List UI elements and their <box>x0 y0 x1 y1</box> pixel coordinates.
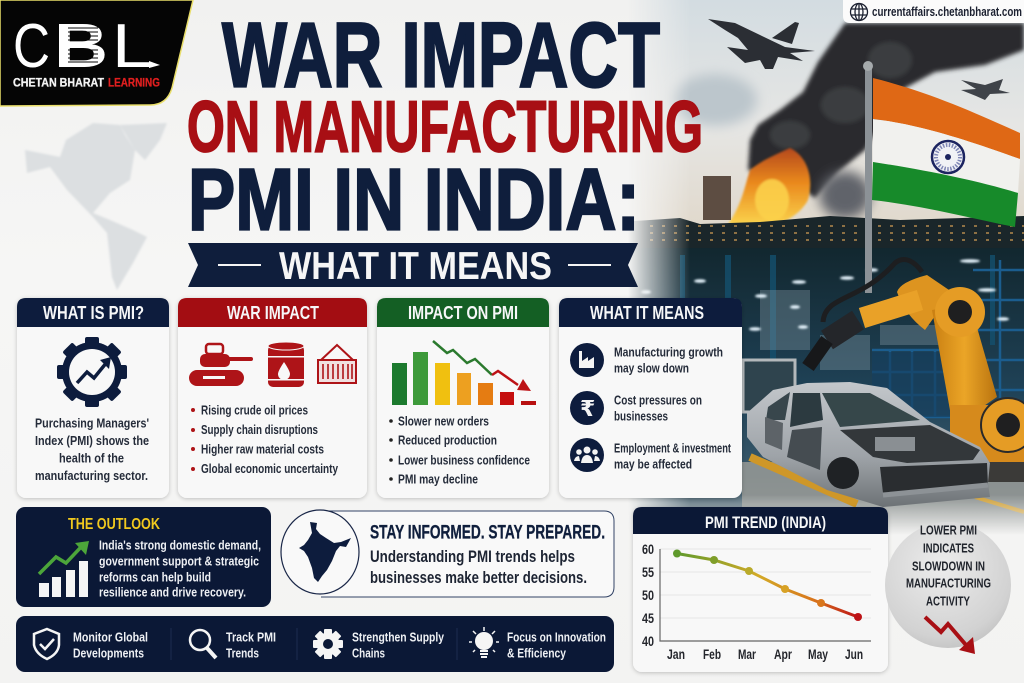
ceiling lights <box>641 259 1009 331</box>
description: government support & strategic <box>99 554 259 568</box>
label: monitor <box>73 630 148 660</box>
cloud <box>673 74 757 126</box>
panel: what is pmi <box>17 298 169 498</box>
bullet list: Supply chain disruptions <box>201 422 318 437</box>
forearm <box>862 300 920 318</box>
jet fighter small <box>961 79 1010 100</box>
title: ON MANUFACTURING <box>187 88 703 168</box>
panel: stay informed <box>281 510 614 597</box>
icon: oil barrel <box>268 342 304 387</box>
logo letters CBL: C <box>13 12 50 81</box>
subtitle banner <box>188 243 638 288</box>
item: growth <box>614 344 723 376</box>
logo caption: LEARNING <box>108 76 160 90</box>
robotic arm <box>808 260 1024 482</box>
logo caption: CHETAN BHARAT <box>13 76 105 90</box>
label: track: Trends <box>226 646 259 660</box>
factory columns <box>680 255 995 360</box>
arrow: downward <box>925 617 975 654</box>
ashoka chakra <box>932 141 964 173</box>
bar chart declining <box>392 341 536 405</box>
city skyline <box>630 216 1024 248</box>
door window <box>790 393 823 427</box>
panel: pmi trend chart <box>633 507 888 672</box>
text: businesses make better decisions. <box>370 568 587 587</box>
item: growth: may slow down <box>614 360 689 376</box>
factory windows <box>760 290 940 370</box>
logo letters CBL: B <box>54 12 108 81</box>
item: cost <box>614 392 702 424</box>
cable <box>823 260 922 322</box>
world map backdrop <box>25 123 167 290</box>
wrist <box>827 320 858 340</box>
callout: lower pmi: LOWER PMI <box>920 524 977 538</box>
item: cost: businesses <box>614 408 668 424</box>
base joint <box>950 398 1024 482</box>
wheel arch <box>827 457 859 489</box>
website badge <box>843 0 1024 23</box>
factory hall <box>620 248 1024 535</box>
y axis labels: 45 <box>642 610 654 626</box>
heading: THE OUTLOOK <box>68 516 160 533</box>
logo caption <box>13 76 160 90</box>
panel: what it means <box>559 298 742 498</box>
description: manufacturing sector. <box>35 468 148 483</box>
heading: WAR IMPACT <box>227 303 319 323</box>
engine block <box>875 437 915 451</box>
smoke plume <box>748 23 1024 198</box>
bullet list: Reduced production <box>398 432 497 448</box>
item: employment: Employment & investment <box>614 440 731 456</box>
x axis labels: Jan <box>667 646 685 662</box>
grid lines and axes <box>660 549 871 641</box>
callout: lower pmi: ACTIVITY <box>926 594 971 608</box>
y axis labels: 60 <box>642 541 654 557</box>
door opening <box>787 427 822 470</box>
callout: lower pmi <box>885 522 1011 654</box>
icon: gear <box>313 629 343 659</box>
icon: gear with chart <box>57 337 127 407</box>
description: Purchasing Managers' <box>35 416 149 430</box>
bullet list: Lower business confidence <box>398 452 530 468</box>
callout: lower pmi: INDICATES <box>923 542 974 556</box>
bullet list <box>191 402 339 476</box>
flagpole <box>863 61 873 293</box>
icon: shield <box>34 629 59 659</box>
distant smoke <box>819 171 871 219</box>
title <box>187 4 703 248</box>
subtitle banner: WHAT IT MEANS <box>279 245 552 288</box>
text: STAY INFORMED. STAY PREPARED. <box>370 522 605 544</box>
description <box>99 538 261 600</box>
heading: WHAT IT MEANS <box>590 303 704 323</box>
label: focus: & Efficiency <box>507 646 567 660</box>
burning tower <box>703 176 731 220</box>
panel: war impact <box>178 298 367 498</box>
text: Understanding PMI trends helps <box>370 547 575 566</box>
description: India's strong domestic demand, <box>99 538 261 552</box>
description: reforms can help build <box>99 570 211 584</box>
icon: light bulb <box>469 627 499 658</box>
car body <box>747 382 990 507</box>
indian flag <box>872 78 1020 227</box>
label: track <box>226 630 276 660</box>
description: Index (PMI) shows the <box>35 433 149 448</box>
icon: rupee: ₹ <box>580 396 595 421</box>
rear door <box>765 417 783 450</box>
car frame on assembly line <box>743 360 990 507</box>
heading: PMI TREND (INDIA) <box>705 513 826 532</box>
label: monitor: Monitor Global <box>73 630 148 644</box>
heading: WHAT IS PMI? <box>43 303 144 323</box>
bumper <box>883 485 988 495</box>
label: strengthen: Chains <box>352 646 385 660</box>
text <box>370 522 605 587</box>
y axis labels: 55 <box>642 564 654 580</box>
x axis labels: Mar <box>738 646 756 662</box>
callout: lower pmi: SLOWDOWN IN <box>912 560 985 574</box>
item: cost: Cost pressures on <box>614 392 702 408</box>
shoulder housing <box>897 275 952 330</box>
logo letters CBL: L <box>112 12 152 81</box>
bullet list <box>389 414 530 486</box>
x axis labels: Jun <box>845 646 863 662</box>
icon: india map in circle <box>281 510 359 594</box>
icon: rupee <box>570 391 604 425</box>
icon: factory <box>570 343 604 377</box>
bullet list: Higher raw material costs <box>201 442 324 456</box>
description <box>35 416 149 483</box>
bullet list: Slower new orders <box>398 414 489 428</box>
bullet list: PMI may decline <box>398 472 478 486</box>
windshield <box>822 393 920 427</box>
factory floor <box>742 462 1024 525</box>
x axis labels <box>667 646 863 662</box>
icon: magnifier <box>190 630 216 658</box>
label: strengthen: Strengthen Supply <box>352 630 445 644</box>
y axis labels <box>642 541 654 649</box>
label: focus <box>507 630 606 660</box>
trend line <box>673 550 862 621</box>
label: track: Track PMI <box>226 630 276 644</box>
engine bay <box>840 425 980 463</box>
jet fighter large <box>708 19 815 69</box>
bullet list: Rising crude oil prices <box>201 402 308 418</box>
heading: IMPACT ON PMI <box>408 303 518 323</box>
item: growth: Manufacturing growth <box>614 344 723 360</box>
platform <box>750 457 857 504</box>
title: WAR IMPACT <box>222 4 660 106</box>
hero image: war and factory scene <box>620 0 1024 535</box>
icon: growth chart <box>39 541 89 597</box>
title: PMI IN INDIA: <box>188 152 640 248</box>
floor stripe <box>975 497 1024 512</box>
icon: tank <box>189 344 253 386</box>
globe icon <box>850 4 868 20</box>
label: focus: Focus on Innovation <box>507 630 606 644</box>
icon: people <box>570 438 604 472</box>
logo block <box>0 0 193 106</box>
label: monitor: Developments <box>73 646 144 660</box>
y axis labels: 40 <box>642 633 654 649</box>
sky <box>620 0 1024 230</box>
front frame <box>880 463 988 493</box>
y axis labels: 50 <box>642 587 654 603</box>
item: employment: may be affected <box>614 456 692 472</box>
panel: impact on pmi <box>377 298 549 498</box>
factory shelving <box>872 260 1024 417</box>
rear window <box>766 392 790 420</box>
callout: lower pmi: MANUFACTURING <box>906 576 991 590</box>
panel: the outlook <box>16 507 271 607</box>
background car shell <box>743 360 795 412</box>
icon: shipping container <box>318 345 356 383</box>
description: health of the <box>59 450 124 466</box>
description: resilience and drive recovery. <box>99 584 246 600</box>
fire <box>728 148 810 226</box>
label: strengthen <box>352 630 445 660</box>
gripper <box>808 340 827 367</box>
shoulder joint <box>935 287 985 337</box>
panel: action bar <box>16 616 614 672</box>
x axis labels: Feb <box>703 646 721 662</box>
logo letters CBL <box>13 12 160 81</box>
item: employment <box>614 440 731 472</box>
x axis labels: Apr <box>774 646 792 662</box>
x axis labels: May <box>808 646 828 662</box>
city lights <box>650 226 1024 240</box>
upper arm <box>932 303 997 427</box>
bullet list: Global economic uncertainty <box>201 461 339 476</box>
